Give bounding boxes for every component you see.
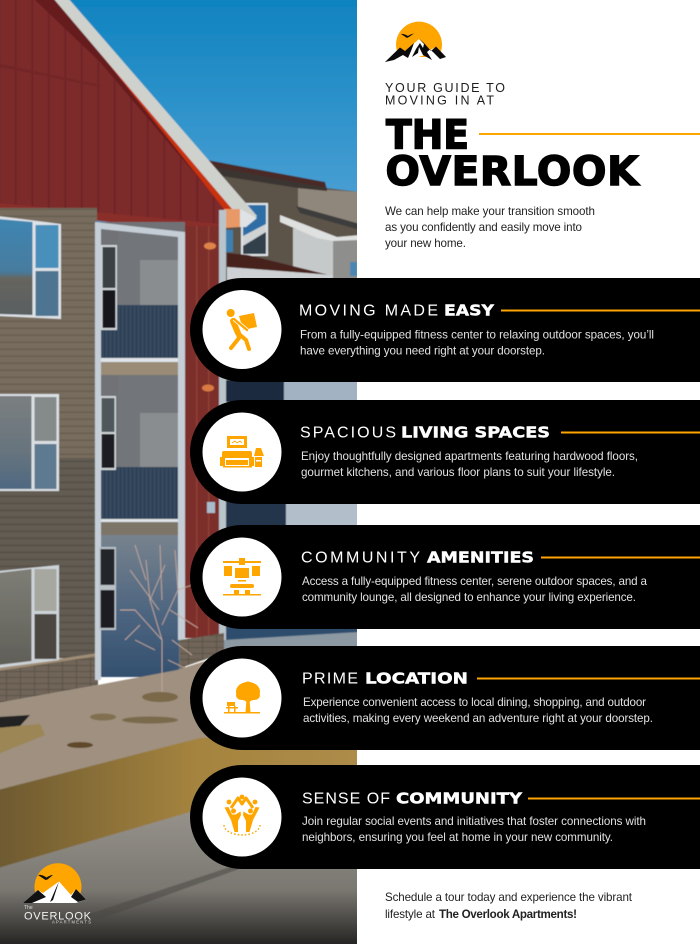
- body text: Enjoy thoughtfully designed apartments featuring hardwood floors,: [301, 450, 638, 463]
- heading: prime location: [302, 670, 468, 688]
- top logo: sun and mountains: [385, 22, 446, 62]
- heading rule: [528, 798, 700, 800]
- subtitle: your guide to moving in at: YOUR GUIDE TO: [385, 81, 505, 95]
- body text: From a fully-equipped fitness center to relaxing outdoor spaces, you’ll: [300, 328, 654, 342]
- title: the overlook: [386, 110, 640, 195]
- subtitle: your guide to moving in at: [385, 81, 505, 108]
- heading rule: [561, 432, 700, 434]
- heading: sense of community: SENSE OF: [302, 790, 390, 808]
- footer call to action: lifestyle at: [385, 908, 436, 921]
- intro paragraph: [385, 205, 595, 250]
- heading: sense of community: [302, 790, 523, 808]
- photo: apartment building: [0, 0, 360, 944]
- body text: activities, making every weekend an adventure right at your doorstep.: [303, 712, 653, 725]
- heading: prime location: PRIME: [302, 670, 358, 688]
- body text: Experience convenient access to local dining, shopping, and outdoor: [303, 696, 646, 709]
- heading: community amenities: COMMUNITY: [301, 550, 420, 566]
- panel: spacious living spaces: [190, 400, 700, 504]
- body text: [303, 696, 653, 725]
- heading: moving made easy: MOVING MADE: [299, 302, 438, 320]
- icon: amenities: [223, 558, 261, 596]
- heading rule: [541, 556, 700, 558]
- footer call to action: Schedule a tour today and experience the vibrant: [385, 891, 633, 904]
- panel: sense of community: [190, 765, 700, 869]
- heading: spacious living spaces: LIVING SPACES: [401, 424, 550, 442]
- body text: [300, 328, 654, 358]
- body text: gourmet kitchens, and various floor plans to suit your lifestyle.: [301, 466, 615, 479]
- heading rule: [501, 310, 700, 312]
- heading: community amenities: AMENITIES: [427, 548, 534, 566]
- body text: have everything you need right at your doorstep.: [300, 344, 545, 358]
- heading rule: [477, 678, 700, 680]
- bottom logo on photo: [23, 863, 92, 924]
- heading: moving made easy: [299, 302, 495, 320]
- icon: group of people: [224, 795, 260, 835]
- panel: prime location: [190, 646, 700, 750]
- footer call to action: The Overlook Apartments!: [439, 908, 577, 921]
- body text: Access a fully-equipped fitness center, serene outdoor spaces, and a: [302, 575, 648, 588]
- icon: sofa and lamp: [220, 436, 264, 468]
- icon: tree and bench: [224, 682, 260, 714]
- bottom logo on photo: OVERLOOK: [24, 910, 92, 922]
- panel: moving made easy: [190, 278, 700, 382]
- body text: community lounge, all designed to enhance your living experience.: [302, 591, 636, 604]
- subtitle: your guide to moving in at: MOVING IN AT: [385, 94, 494, 108]
- body text: Join regular social events and initiatives that foster connections with: [302, 815, 646, 828]
- heading: sense of community: COMMUNITY: [396, 790, 523, 808]
- heading: moving made easy: EASY: [444, 302, 495, 320]
- body text: [302, 575, 648, 604]
- bottom logo on photo: APARTMENTS: [52, 920, 91, 924]
- bottom logo on photo: The: [24, 905, 33, 911]
- heading: prime location: LOCATION: [365, 670, 468, 688]
- intro paragraph: as you confidently and easily move into: [385, 221, 582, 234]
- intro paragraph: We can help make your transition smooth: [385, 205, 595, 218]
- icon: person carrying box: [227, 309, 257, 349]
- heading: spacious living spaces: SPACIOUS: [300, 424, 396, 442]
- body text: neighbors, ensuring you feel at home in your new community.: [302, 831, 613, 844]
- footer call to action: [385, 891, 633, 921]
- title accent line: [479, 133, 700, 135]
- panel: community amenities: [190, 525, 700, 629]
- body text: [301, 450, 638, 479]
- intro paragraph: your new home.: [385, 237, 466, 250]
- heading: spacious living spaces: [300, 424, 550, 442]
- title: the overlook: THE: [386, 110, 469, 158]
- heading: community amenities: [301, 548, 534, 566]
- title: the overlook: OVERLOOK: [386, 147, 640, 195]
- body text: [302, 815, 646, 844]
